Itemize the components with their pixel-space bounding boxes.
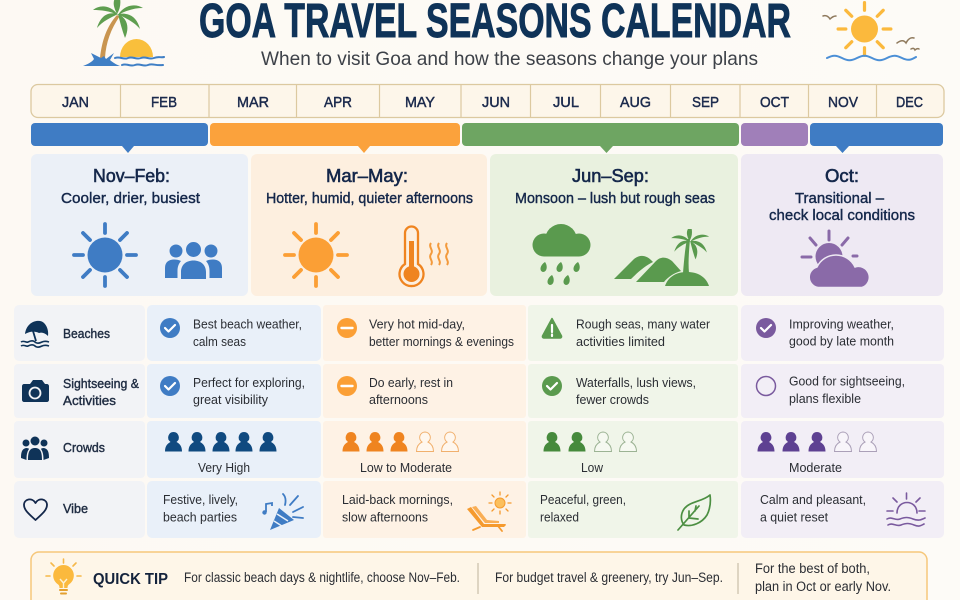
row labels <box>14 305 145 538</box>
month ruler: MAR <box>237 95 269 111</box>
month ruler: NOV <box>828 95 858 111</box>
row labels: Activities <box>63 393 117 408</box>
callout: quick tip <box>31 552 927 600</box>
icon: check <box>542 376 562 396</box>
month ruler <box>31 84 944 118</box>
subtitle: When to visit Goa and how the seasons change your plans <box>261 48 758 70</box>
panel: Mar–May <box>251 154 487 296</box>
icon: sun lounger <box>467 492 511 531</box>
season colour bars <box>31 123 943 153</box>
column: Nov–Feb details: Festive, lively, <box>163 492 238 507</box>
icon: thermometer with heat waves <box>400 227 448 286</box>
panel: Oct: Oct: <box>825 165 859 186</box>
column: Jun–Sep details: Low <box>581 460 604 475</box>
panel: Jun–Sep: Jun–Sep: <box>572 165 649 186</box>
column: Mar–May details: Do early, rest in <box>369 375 453 390</box>
month ruler: OCT <box>760 95 789 111</box>
column: Oct details: Calm and pleasant, <box>760 492 866 507</box>
column: Oct details: Good for sightseeing, <box>789 374 905 388</box>
month ruler: SEP <box>692 95 719 111</box>
icon: sunset over water <box>887 493 925 526</box>
month ruler: DEC <box>896 95 923 111</box>
icon: sun over sea with birds <box>823 3 919 60</box>
icon: orange sun <box>285 224 347 286</box>
callout: quick tip: For classic beach days & nightlife, choose Nov–Feb. <box>184 570 460 585</box>
panel: Nov–Feb <box>31 154 248 296</box>
panel: Mar–May: Hotter, humid, quieter afternoons <box>266 190 473 207</box>
crowd rating: five of five <box>165 432 276 452</box>
column: Oct details <box>741 305 944 538</box>
column: Oct details: Improving weather, <box>789 316 894 332</box>
callout: quick tip: For budget travel & greenery, try Jun–Sep. <box>495 570 723 585</box>
column: Nov–Feb details <box>147 305 321 538</box>
panel: Nov–Feb: Nov–Feb: <box>93 165 170 186</box>
column: Mar–May details: better mornings & evenings <box>369 334 514 349</box>
icon: party popper <box>262 494 303 530</box>
column: Mar–May details <box>323 305 526 538</box>
column: Oct details: good by late month <box>789 334 894 348</box>
icon: leaf <box>678 495 710 530</box>
panel: Oct: check local conditions <box>769 207 915 224</box>
icon: check <box>756 318 776 338</box>
icon: beach umbrella <box>21 321 49 347</box>
column: Jun–Sep details: activities limited <box>576 334 665 349</box>
column: Jun–Sep details: relaxed <box>540 510 579 524</box>
row labels: Sightseeing & <box>63 376 139 391</box>
column: Nov–Feb details: Perfect for exploring, <box>193 375 305 390</box>
icon: rain cloud <box>532 224 590 285</box>
column: Jun–Sep details: Rough seas, many water <box>576 316 711 332</box>
panel: Oct: Transitional – <box>795 190 885 207</box>
panel: Oct <box>741 154 943 296</box>
callout: quick tip: plan in Oct or early Nov. <box>755 579 891 594</box>
icon: check <box>160 376 180 396</box>
column: Jun–Sep details <box>528 305 738 538</box>
row labels: Vibe <box>63 501 88 516</box>
column: Oct details: a quiet reset <box>760 510 828 524</box>
callout: quick tip: For the best of both, <box>755 561 870 576</box>
icon: blue sun <box>74 224 136 286</box>
icon: check <box>160 318 180 338</box>
icon: group of people <box>165 242 222 279</box>
icon: sun behind cloud <box>802 231 869 288</box>
icon: caution minus <box>337 318 357 338</box>
month ruler: JAN <box>62 95 89 111</box>
column: Nov–Feb details: beach parties <box>163 510 237 524</box>
column: Jun–Sep details: Peaceful, green, <box>540 492 626 507</box>
column: Nov–Feb details: calm seas <box>193 334 246 349</box>
crowd rating: two of five <box>544 432 636 452</box>
column: Oct details: Moderate <box>789 460 842 475</box>
month ruler: APR <box>324 95 352 111</box>
icon: crowd <box>21 436 49 460</box>
icon: camera <box>22 380 49 402</box>
icon: warning triangle <box>542 318 562 338</box>
panel: Mar–May: Mar–May: <box>326 165 408 186</box>
column: Oct details: plans flexible <box>789 391 861 406</box>
icon: caution minus <box>337 376 357 396</box>
column: Mar–May details: Low to Moderate <box>360 460 452 475</box>
row labels: Crowds <box>63 440 105 455</box>
crowd rating: three of five <box>758 432 876 452</box>
icon: light bulb <box>46 559 81 594</box>
panel: Jun–Sep <box>490 154 738 296</box>
panel: Jun–Sep: Monsoon – lush but rough seas <box>515 190 715 207</box>
month ruler: FEB <box>151 95 177 111</box>
column: Nov–Feb details: Best beach weather, <box>193 316 302 332</box>
column: Jun–Sep details: Waterfalls, lush views, <box>576 375 696 390</box>
crowd rating: three of five <box>342 432 458 452</box>
callout: quick tip: QUICK TIP <box>93 571 168 588</box>
icon: open circle <box>756 376 776 396</box>
column: Jun–Sep details: fewer crowds <box>576 392 649 407</box>
column: Mar–May details: afternoons <box>369 392 428 407</box>
month ruler: AUG <box>620 95 651 111</box>
panel: Nov–Feb: Cooler, drier, busiest <box>61 190 201 207</box>
month ruler: MAY <box>405 95 435 111</box>
column: Mar–May details: Very hot mid-day, <box>369 316 465 332</box>
column: Nov–Feb details: Very High <box>198 460 250 475</box>
column: Mar–May details: Laid-back mornings, <box>342 492 453 507</box>
icon: green hills and palm <box>614 229 709 286</box>
month ruler: JUN <box>482 95 510 111</box>
column: Mar–May details: slow afternoons <box>342 510 428 524</box>
month ruler: JUL <box>553 95 579 111</box>
icon: palm island with setting sun <box>83 0 164 66</box>
icon: heart <box>24 499 47 520</box>
column: Nov–Feb details: great visibility <box>193 392 268 407</box>
row labels: Beaches <box>63 326 110 341</box>
